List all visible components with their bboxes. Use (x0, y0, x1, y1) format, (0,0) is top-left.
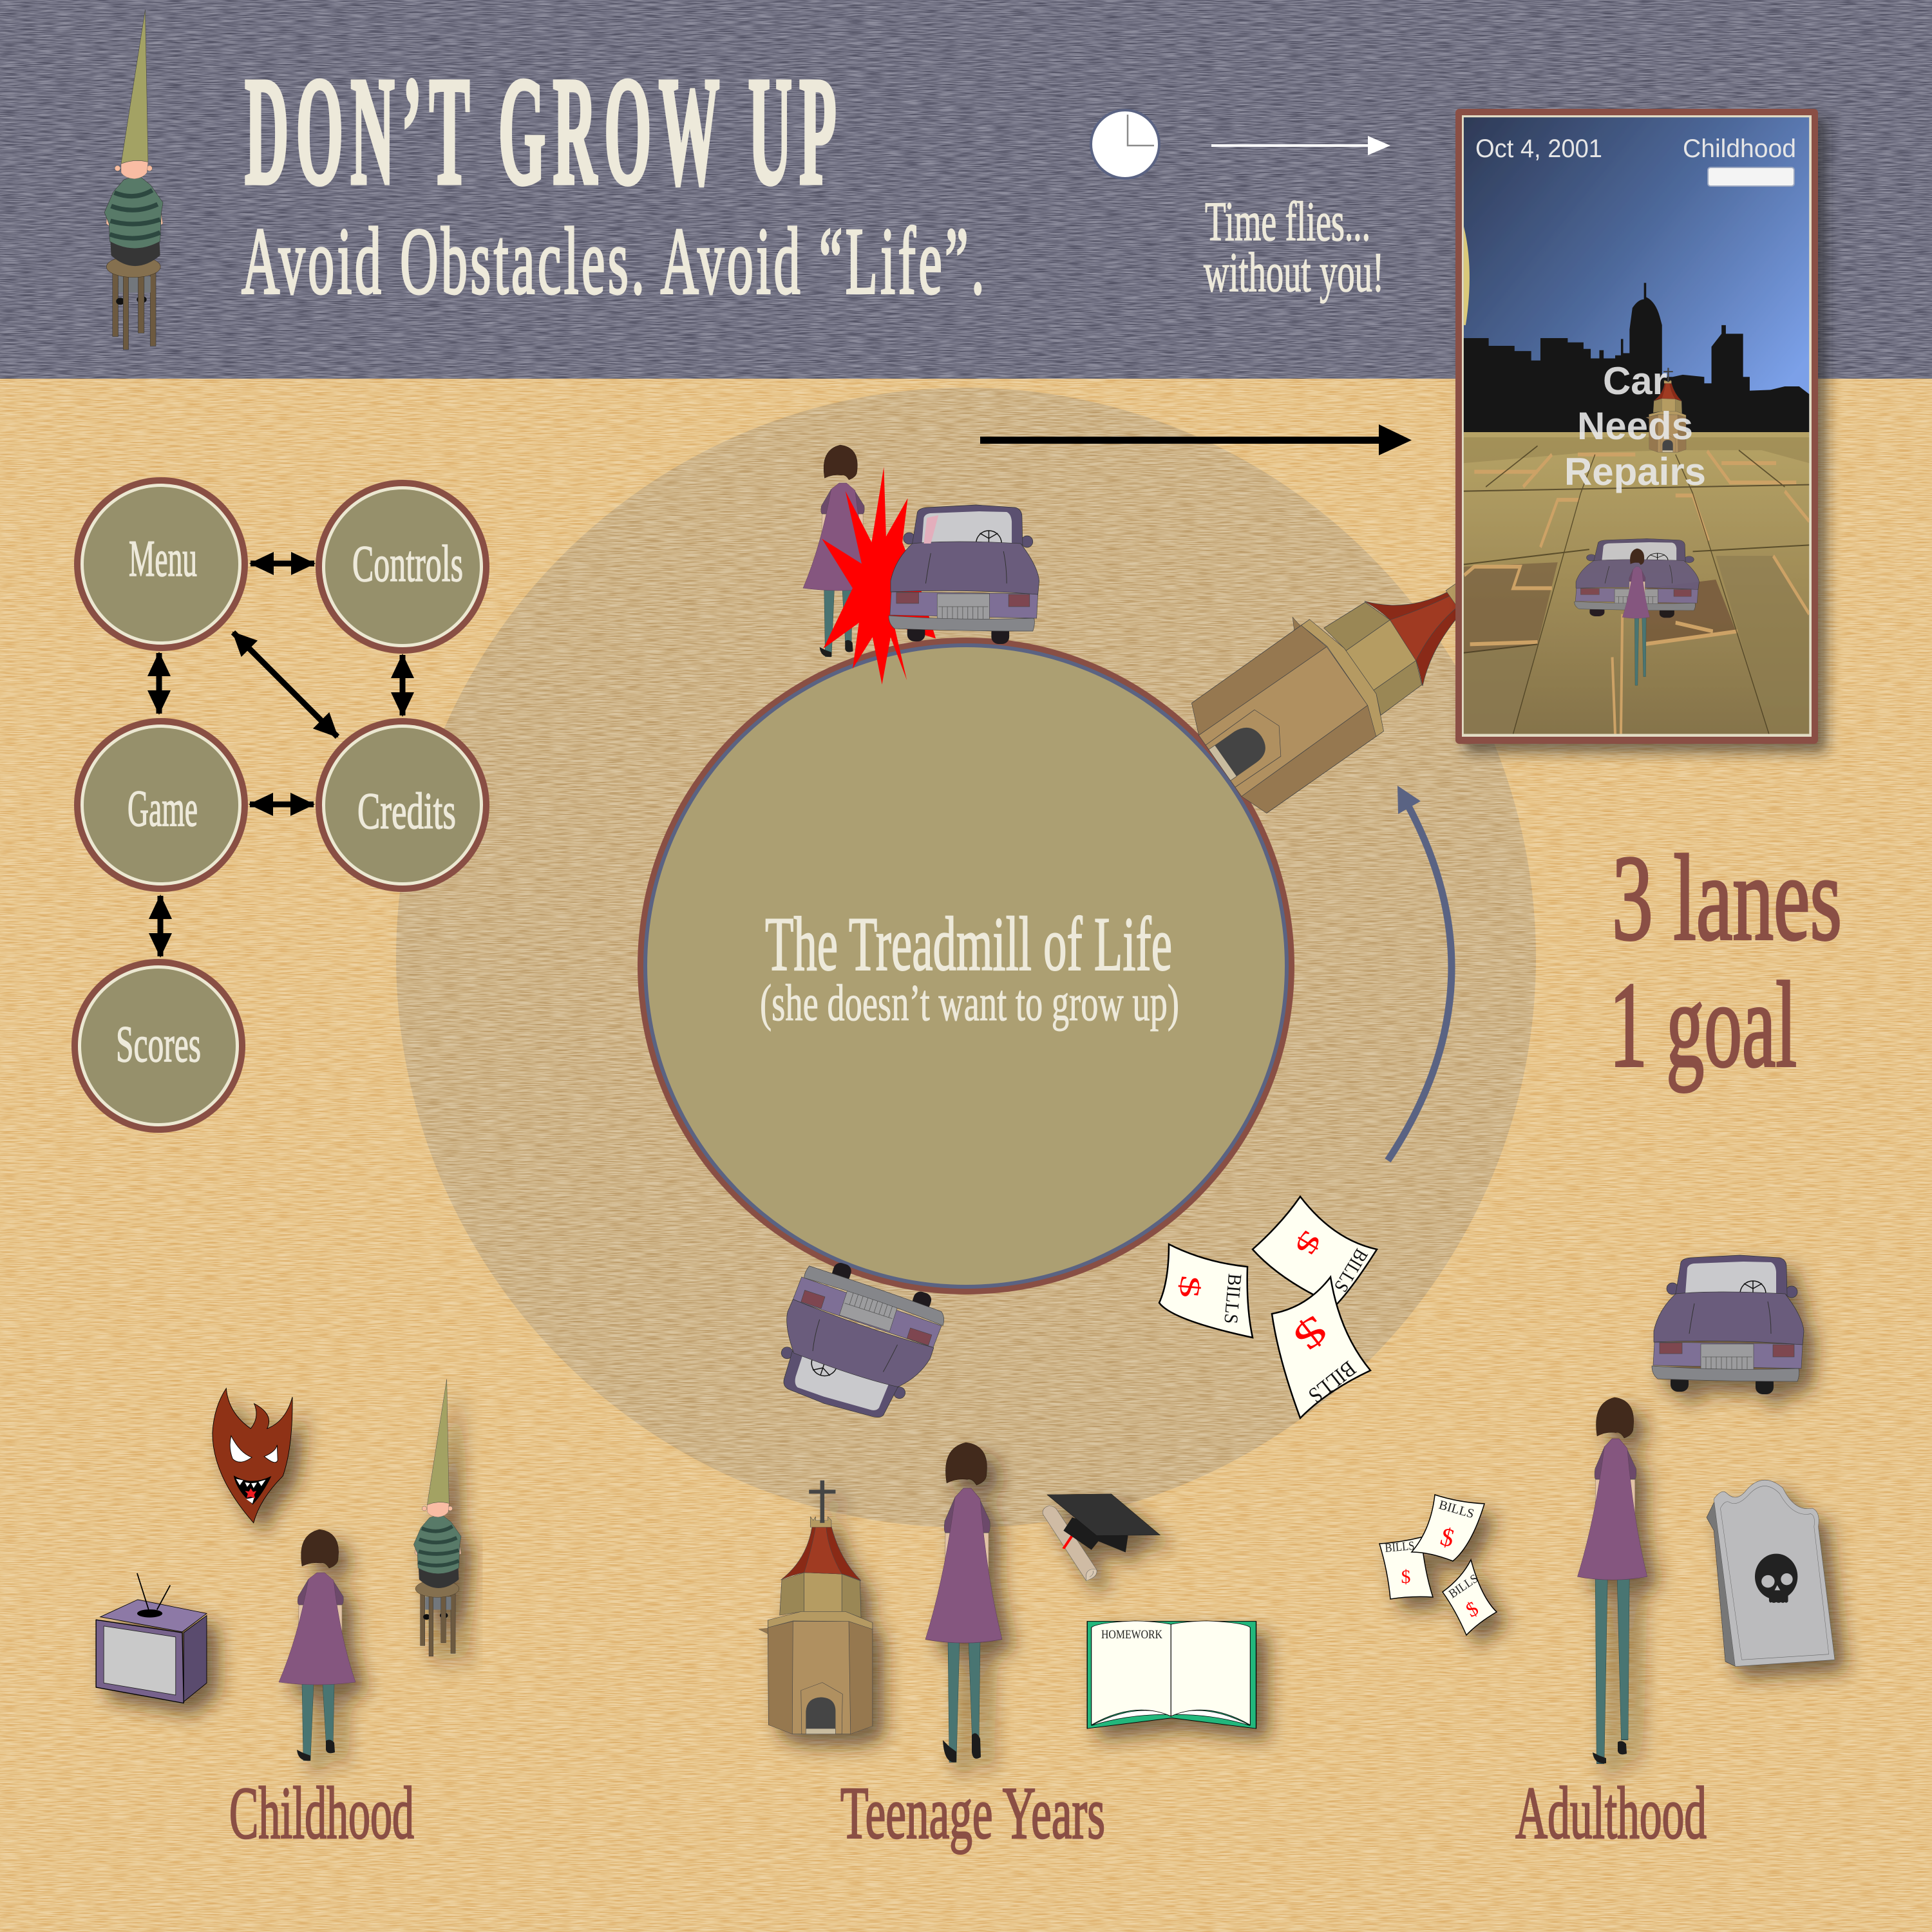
adulthood group (1379, 1255, 1835, 1854)
screen text: stage: Childhood (1683, 135, 1796, 163)
screenshot scene (1464, 117, 1809, 734)
arrow: time (1211, 136, 1390, 155)
adult bills: $ (1401, 1566, 1410, 1587)
bill C: $ (1285, 1307, 1336, 1359)
large translucent circle (396, 388, 1536, 1528)
label: childhood: Childhood (229, 1772, 414, 1854)
icon: devil mask (213, 1388, 292, 1523)
childhood girl (279, 1530, 355, 1761)
callout: 1 goal: 1 goal (1609, 958, 1797, 1093)
menu node: Menu: Menu (129, 531, 197, 587)
icon: tombstone (1707, 1480, 1835, 1667)
adult girl (1578, 1397, 1647, 1763)
text: DON’T GROW UP (245, 45, 844, 216)
adult bills: $ (1437, 1522, 1457, 1553)
book text: HOMEWORK (1101, 1628, 1162, 1642)
bill A: BILLS (1220, 1273, 1245, 1325)
teen church (759, 1481, 873, 1734)
adult bills: $ (1462, 1596, 1482, 1622)
menu node: Game: Game (128, 781, 198, 837)
bill B: $ (1289, 1226, 1327, 1261)
icon: graduation cap and scroll (1043, 1494, 1160, 1580)
text: without you: without you! (1204, 241, 1384, 303)
upside-down car (764, 1252, 952, 1431)
bill C (1272, 1277, 1370, 1418)
screen text: obstacle message: Car (1603, 359, 1667, 402)
treadmill title: The Treadmill of Life (765, 901, 1172, 987)
teenage group (759, 1443, 1256, 1854)
menu node: Credits (316, 718, 489, 892)
menu node: Credits: Credits (357, 783, 456, 840)
header band (0, 0, 1932, 379)
icon: television (96, 1573, 207, 1703)
label: adulthood: Adulthood (1515, 1772, 1707, 1854)
adult bills: BILLS (1437, 1498, 1476, 1521)
menu node: Scores (71, 959, 245, 1133)
icon: explosion (822, 467, 936, 685)
bill A (1159, 1244, 1253, 1338)
game screenshot panel (1455, 109, 1818, 744)
menu flow chart (71, 477, 489, 1133)
menu arrows (159, 564, 402, 956)
adult bills: BILLS (1385, 1539, 1415, 1555)
childhood gnome (413, 1379, 461, 1656)
menu node: Controls (316, 480, 489, 654)
menu node: Menu (74, 477, 248, 651)
subtitle: Avoid Obstacles. Avoid “Life”. (242, 209, 987, 314)
screen text: date: Oct 4, 2001 (1475, 135, 1602, 163)
menu node: Controls: Controls (352, 536, 463, 592)
menu node: Scores: Scores (116, 1016, 201, 1073)
text: time flies: Time flies... (1205, 190, 1370, 252)
treadmill girl (803, 445, 876, 657)
bill A: $ (1173, 1274, 1206, 1300)
header gnome on stool (104, 10, 163, 350)
teen girl (925, 1443, 1002, 1762)
adult bills (1379, 1495, 1497, 1635)
icon: clock (1091, 110, 1159, 178)
treadmill circle (638, 638, 1294, 1294)
bill B (1253, 1197, 1377, 1305)
screen text: obstacle message: Repairs (1564, 450, 1706, 493)
treadmill car (889, 505, 1039, 644)
adult bills: BILLS (1446, 1572, 1481, 1601)
label: teenage years: Teenage Years (840, 1772, 1105, 1854)
icon: homework book (1087, 1621, 1256, 1728)
treadmill subtitle: (she doesn’t want to grow up) (760, 975, 1179, 1032)
bill B: BILLS (1330, 1245, 1372, 1296)
curved arrow (1388, 786, 1452, 1160)
arrow: black to screen (980, 424, 1412, 455)
screen text: obstacle message: Needs (1577, 404, 1693, 448)
treadmill church (1174, 499, 1544, 819)
screen text: obstacle message (1564, 359, 1706, 493)
bill C: BILLS (1303, 1356, 1360, 1407)
menu node: Game (74, 718, 248, 892)
childhood group (96, 1379, 461, 1854)
progress bar (1708, 167, 1794, 186)
adult car (1652, 1255, 1804, 1394)
